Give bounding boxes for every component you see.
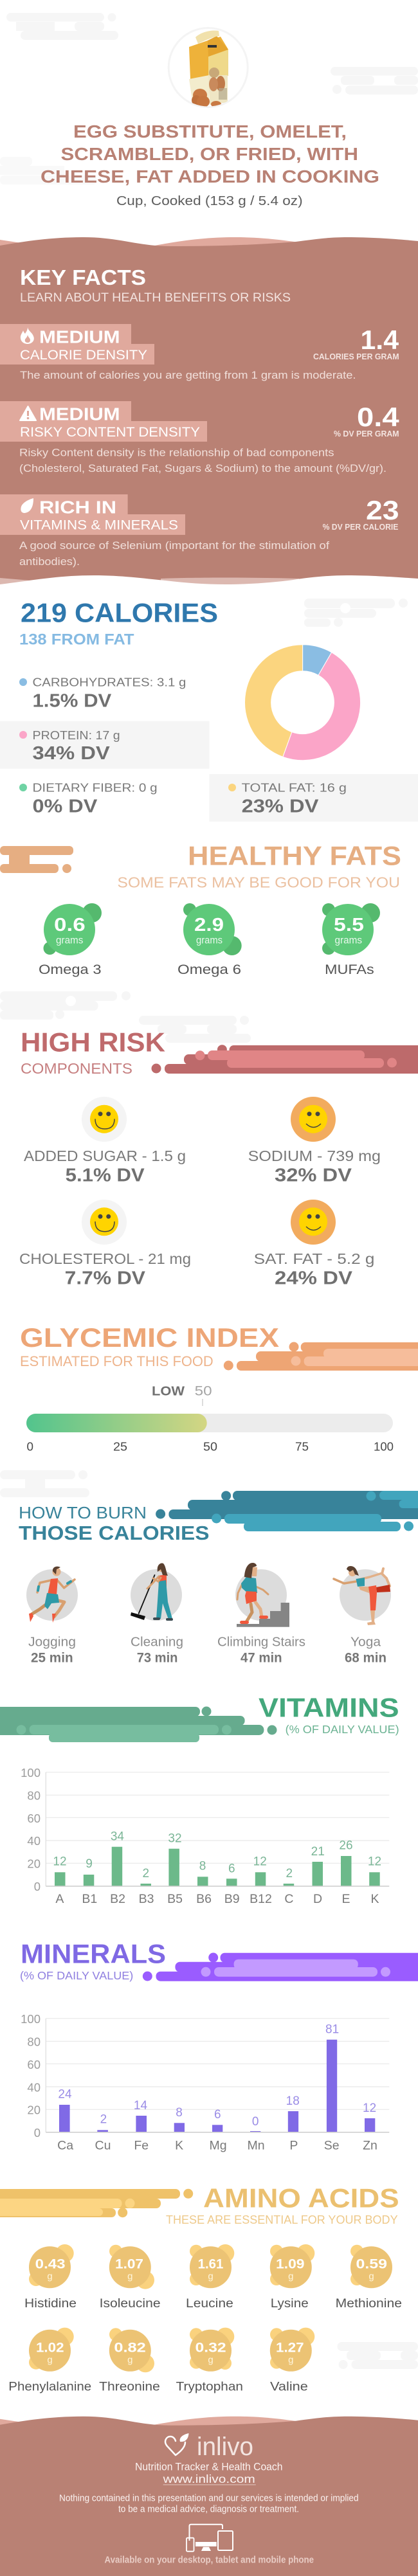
fact: calorie density: CALORIES PER GRAM xyxy=(313,352,399,361)
panel: high risk components xyxy=(19,1027,418,1288)
fact: rich in vitamins and minerals: % DV PER CALORIE xyxy=(323,522,399,532)
legend: dietary fiber: DIETARY FIBER: 0 g xyxy=(32,781,158,795)
bar chart: minerals: 0 xyxy=(34,2126,41,2139)
bar chart: vitamins: B12 xyxy=(250,1892,272,1906)
activity: yoga: Yoga xyxy=(350,1635,381,1650)
bar chart: minerals: Ca xyxy=(57,2138,73,2152)
legend: carbohydrates: CARBOHYDRATES: 3.1 g xyxy=(32,676,186,689)
fact: rich in vitamins and minerals xyxy=(0,494,399,568)
activity: yoga: 68 min xyxy=(345,1651,386,1666)
amino: methionine: g xyxy=(368,2271,374,2282)
bar chart: vitamins: 2 xyxy=(143,1867,149,1880)
amino: threonine: 0.82 xyxy=(114,2340,146,2355)
activity: jogging: Jogging xyxy=(28,1635,76,1650)
fact: risky content density: 0.4 xyxy=(357,402,399,432)
icon: person in yoga pose xyxy=(334,1566,390,1625)
gauge scale: 100 xyxy=(374,1440,394,1454)
amino: tryptophan: Tryptophan xyxy=(176,2379,243,2393)
bar chart: minerals: 100 xyxy=(21,2012,41,2026)
amino: methionine: 0.59 xyxy=(356,2256,387,2271)
ribbon: orange xyxy=(0,846,73,873)
amino: isoleucine: Isoleucine xyxy=(100,2296,161,2310)
icon: jogger xyxy=(29,1567,75,1623)
bar chart: vitamins: B1 xyxy=(82,1892,97,1906)
gauge scale: 25 xyxy=(113,1440,127,1454)
bar chart: minerals: 81 xyxy=(325,2022,339,2036)
bar chart: vitamins: 12 xyxy=(368,1855,381,1869)
title xyxy=(41,122,379,186)
amino: lysine: 1.09 xyxy=(276,2256,305,2271)
bar chart: minerals: 8 xyxy=(176,2106,183,2120)
fact: rich in vitamins and minerals: VITAMINS & MINERALS xyxy=(20,517,178,532)
bar chart: minerals: 24 xyxy=(58,2087,72,2101)
bar chart: vitamins: 32 xyxy=(168,1832,182,1846)
subheading: ESTIMATED FOR THIS FOOD xyxy=(20,1353,214,1369)
amino: phenylalanine: 1.02 xyxy=(36,2340,64,2355)
bar chart: vitamins: C xyxy=(284,1892,293,1906)
legend: dietary fiber xyxy=(19,781,158,816)
ribbon: orange xyxy=(224,1342,418,1371)
amino: valine xyxy=(270,2328,314,2393)
legend: protein xyxy=(0,721,210,769)
bar chart: vitamins: 26 xyxy=(339,1839,353,1853)
amino: isoleucine: 1.07 xyxy=(115,2256,143,2271)
bar chart: vitamins: 100 xyxy=(21,1766,41,1779)
fact: calorie density: MEDIUM xyxy=(39,327,120,347)
gauge reading xyxy=(152,1384,212,1406)
risk item: sodium xyxy=(248,1097,381,1185)
badge: omega 3 xyxy=(39,903,102,977)
risk item: cholesterol: CHOLESTEROL - 21 mg xyxy=(19,1250,191,1267)
bar chart: vitamins: 80 xyxy=(27,1788,41,1802)
icon: desktop, tablet and phone xyxy=(186,2525,233,2552)
bar chart: vitamins: A xyxy=(55,1892,64,1906)
heading: how to burn: HOW TO BURN xyxy=(19,1503,147,1522)
fact: risky content density: RISKY CONTENT DENSITY xyxy=(20,424,200,440)
serving size: Cup, Cooked (153 g / 5.4 oz) xyxy=(116,194,303,208)
subheading: (% OF DAILY VALUE) xyxy=(286,1723,399,1736)
bar chart: minerals: 2 xyxy=(100,2113,107,2127)
risk item: added sugar: ADDED SUGAR - 1.5 g xyxy=(24,1148,186,1164)
bar chart: vitamins xyxy=(21,1766,389,1906)
fact: risky content density: (Cholesterol, Saturated Fat, Sugars & Sodium) to the amount (%DV/gr). xyxy=(19,462,386,474)
activity: jogging xyxy=(26,1567,78,1666)
fact: rich in vitamins and minerals: A good source of Selenium (important for the stimulation of xyxy=(19,539,329,552)
subheading: from fat: 138 FROM FAT xyxy=(19,631,134,649)
bar chart: minerals: Mg xyxy=(209,2138,227,2152)
badge: mufas: 5.5 xyxy=(334,915,364,935)
fact: calorie density: 1.4 xyxy=(360,325,399,355)
amino: valine: Valine xyxy=(270,2379,308,2393)
legend: total fat: TOTAL FAT: 16 g xyxy=(242,781,347,795)
legend: protein: PROTEIN: 17 g xyxy=(32,728,120,742)
disclaimer: to be a medical advice, diagnosis or treatment. xyxy=(118,2504,299,2514)
panel: vitamins xyxy=(0,1693,399,1906)
amino: tryptophan xyxy=(176,2328,243,2393)
panel: how to burn those calories xyxy=(19,1491,418,1666)
badge: omega 6: 2.9 xyxy=(194,915,224,935)
badge: omega 6: Omega 6 xyxy=(177,962,241,977)
amino: threonine: Threonine xyxy=(99,2379,160,2393)
title: CHEESE, FAT ADDED IN COOKING xyxy=(41,167,379,186)
activity: cleaning xyxy=(131,1563,183,1666)
title: SCRAMBLED, OR FRIED, WITH xyxy=(60,144,358,164)
tagline: Nutrition Tracker & Health Coach xyxy=(135,2460,283,2472)
bar chart: vitamins: 20 xyxy=(27,1857,41,1871)
amino: tryptophan: g xyxy=(208,2355,214,2366)
subheading: SOME FATS MAY BE GOOD FOR YOU xyxy=(117,874,400,891)
logo: inlivo: inlivo xyxy=(197,2433,253,2461)
subheading: (% OF DAILY VALUE) xyxy=(20,1969,133,1982)
bar chart: vitamins: 40 xyxy=(27,1834,41,1848)
heading: vitamins: VITAMINS xyxy=(259,1693,399,1723)
amino: phenylalanine xyxy=(8,2328,91,2393)
risk item: added sugar xyxy=(24,1097,186,1185)
donut chart xyxy=(245,645,361,761)
bar chart: vitamins: 60 xyxy=(27,1812,41,1825)
icon: person sweeping xyxy=(131,1563,173,1621)
ribbon: red xyxy=(152,1045,418,1074)
badge: omega 6 xyxy=(177,903,242,977)
bar chart: minerals: P xyxy=(289,2138,298,2152)
activity: jogging: 25 min xyxy=(31,1651,73,1666)
badge: mufas: MUFAs xyxy=(325,962,374,977)
bar chart: vitamins: 21 xyxy=(311,1845,325,1859)
icon: flame xyxy=(21,327,34,344)
risk item: saturated fat xyxy=(254,1200,374,1288)
amino: histidine xyxy=(24,2244,77,2310)
amino: methionine: Methionine xyxy=(336,2296,402,2310)
badge: omega 6: grams xyxy=(196,935,223,946)
bar chart: minerals: 80 xyxy=(27,2035,41,2048)
amino: isoleucine: g xyxy=(127,2271,132,2282)
fact: calorie density: CALORIE DENSITY xyxy=(20,347,147,363)
panel: healthy fats xyxy=(0,841,401,977)
fact: rich in vitamins and minerals: RICH IN xyxy=(39,497,116,517)
fact: risky content density xyxy=(0,401,399,474)
amino: tryptophan: 0.32 xyxy=(195,2340,226,2355)
bar chart: minerals: K xyxy=(175,2138,183,2152)
risk item: sodium: SODIUM - 739 mg xyxy=(248,1148,381,1164)
badge: omega 3: grams xyxy=(56,935,83,946)
heading: key facts: KEY FACTS xyxy=(20,266,146,289)
ribbon: green xyxy=(0,1706,277,1742)
bar chart: minerals xyxy=(21,2012,389,2152)
amino: valine: 1.27 xyxy=(276,2340,304,2355)
icon: warning triangle xyxy=(20,406,36,420)
heading: calories: 219 CALORIES xyxy=(21,598,218,628)
badge: omega 3: 0.6 xyxy=(54,915,86,935)
amino: leucine: 1.61 xyxy=(198,2256,224,2271)
fact: calorie density xyxy=(0,324,399,381)
gauge bar xyxy=(26,1414,393,1432)
bar chart: vitamins: 9 xyxy=(86,1857,93,1871)
bar chart: minerals: 0 xyxy=(252,2115,259,2129)
heading: amino acids: AMINO ACIDS xyxy=(203,2183,399,2213)
disclaimer xyxy=(59,2494,359,2514)
bar chart: vitamins: 6 xyxy=(228,1862,235,1875)
bar chart: vitamins: B3 xyxy=(139,1892,154,1906)
risk item: cholesterol: 7.7% DV xyxy=(65,1268,146,1288)
badge: omega 3: Omega 3 xyxy=(39,962,102,977)
amino: leucine: g xyxy=(208,2271,214,2282)
icon: person climbing stairs xyxy=(237,1563,289,1627)
legend: carbohydrates: 1.5% DV xyxy=(32,690,112,711)
availability note: Available on your desktop, tablet and mobile phone xyxy=(104,2555,314,2566)
heading: minerals: MINERALS xyxy=(21,1938,166,1968)
bar chart: vitamins: E xyxy=(341,1892,350,1906)
amino: leucine: Leucine xyxy=(186,2296,233,2310)
bar chart: minerals: 18 xyxy=(286,2094,300,2108)
fact: risky content density: MEDIUM xyxy=(39,404,120,424)
bar chart: vitamins: B2 xyxy=(110,1892,125,1906)
bar chart: vitamins: 8 xyxy=(199,1860,206,1873)
bar chart: minerals: 12 xyxy=(363,2102,376,2115)
amino: isoleucine xyxy=(100,2245,161,2310)
badge: mufas: grams xyxy=(334,935,362,946)
gauge scale: 0 xyxy=(27,1440,33,1454)
amino: methionine xyxy=(336,2245,402,2310)
amino: leucine xyxy=(186,2244,234,2310)
gauge scale xyxy=(27,1440,394,1454)
heading: high risk: HIGH RISK xyxy=(21,1027,165,1058)
risk item: added sugar: 5.1% DV xyxy=(66,1165,145,1185)
bar chart: minerals: 20 xyxy=(27,2103,41,2117)
panel: calories xyxy=(0,598,418,822)
bar chart: vitamins: B5 xyxy=(167,1892,183,1906)
bar chart: minerals: Zn xyxy=(363,2138,377,2152)
activity: climbing stairs xyxy=(217,1563,305,1666)
activity: climbing stairs: 47 min xyxy=(241,1651,282,1666)
logo: inlivo xyxy=(165,2433,253,2461)
subheading: LEARN ABOUT HEALTH BENEFITS OR RISKS xyxy=(20,291,291,305)
bar chart: vitamins: 12 xyxy=(53,1855,67,1869)
panel: amino acids xyxy=(0,2183,402,2393)
panel: key facts xyxy=(0,237,418,595)
amino: lysine: Lysine xyxy=(271,2296,309,2310)
amino: threonine: g xyxy=(127,2355,132,2366)
amino: lysine: g xyxy=(288,2271,293,2282)
bar chart: minerals: 14 xyxy=(134,2099,147,2112)
website link: www.inlivo.com xyxy=(163,2472,255,2485)
bar chart: vitamins: B6 xyxy=(196,1892,212,1906)
gauge reading: 50 xyxy=(195,1384,212,1399)
heading: those calories: THOSE CALORIES xyxy=(19,1522,210,1544)
bar chart: vitamins: K xyxy=(370,1892,379,1906)
amino: histidine: Histidine xyxy=(24,2296,77,2310)
activity: yoga xyxy=(334,1566,391,1666)
legend: total fat xyxy=(210,774,418,822)
bar chart: minerals: Cu xyxy=(95,2138,111,2152)
amino: threonine xyxy=(99,2328,160,2393)
fact: rich in vitamins and minerals: 23 xyxy=(366,495,399,525)
gauge reading: LOW xyxy=(152,1384,185,1399)
amino: histidine: 0.43 xyxy=(35,2256,66,2271)
title: EGG SUBSTITUTE, OMELET, xyxy=(73,122,347,141)
legend: carbohydrates xyxy=(19,676,186,711)
subheading: THESE ARE ESSENTIAL FOR YOUR BODY xyxy=(166,2213,398,2226)
legend: total fat: 23% DV xyxy=(242,796,319,816)
amino: histidine: g xyxy=(47,2271,53,2282)
bar chart: minerals: Mn xyxy=(247,2138,265,2152)
fact: calorie density: The amount of calories you are getting from 1 gram is moderate. xyxy=(20,369,356,381)
panel: minerals xyxy=(20,1938,418,2152)
gauge scale: 75 xyxy=(295,1440,309,1454)
bar chart: minerals: Fe xyxy=(134,2138,149,2152)
bar chart: vitamins: 0 xyxy=(34,1880,41,1893)
gauge scale: 50 xyxy=(203,1440,217,1454)
risk item: sodium: 32% DV xyxy=(275,1165,352,1185)
heading: healthy fats: HEALTHY FATS xyxy=(188,841,401,871)
bar chart: vitamins: B9 xyxy=(224,1892,240,1906)
amino: valine: g xyxy=(288,2355,293,2366)
ribbon: yellow xyxy=(0,2189,193,2217)
bar chart: vitamins: 2 xyxy=(286,1867,293,1880)
legend: dietary fiber: 0% DV xyxy=(32,796,98,816)
bar chart: minerals: Se xyxy=(324,2138,340,2152)
risk item: cholesterol xyxy=(19,1200,191,1288)
risk item: saturated fat: SAT. FAT - 5.2 g xyxy=(254,1250,374,1267)
bar chart: vitamins: D xyxy=(313,1892,322,1906)
activity: climbing stairs: Climbing Stairs xyxy=(217,1635,305,1650)
badge: mufas xyxy=(322,903,380,977)
fact: risky content density: Risky Content density is the relationship of bad components xyxy=(19,446,334,458)
panel: footer xyxy=(0,2417,418,2576)
panel: glycemic index xyxy=(20,1322,418,1454)
bar chart: minerals: 40 xyxy=(27,2080,41,2094)
bar chart: minerals: 60 xyxy=(27,2058,41,2071)
fact: risky content density: % DV PER GRAM xyxy=(334,429,399,438)
bar chart: minerals: 6 xyxy=(214,2108,221,2121)
amino: lysine xyxy=(270,2244,314,2310)
bar chart: vitamins: 12 xyxy=(253,1855,267,1869)
activity: cleaning: Cleaning xyxy=(131,1635,183,1650)
ribbon: teal xyxy=(156,1491,418,1531)
subheading: components: COMPONENTS xyxy=(21,1060,132,1077)
disclaimer: Nothing contained in this presentation and our services is intended or implied xyxy=(59,2494,359,2504)
icon: leaf xyxy=(21,498,33,513)
risk item: saturated fat: 24% DV xyxy=(275,1268,353,1288)
amino: phenylalanine: Phenylalanine xyxy=(8,2379,91,2393)
fact: rich in vitamins and minerals: antibodies). xyxy=(19,555,80,568)
food photo: egg substitute carton xyxy=(168,28,248,107)
bar chart: vitamins: 34 xyxy=(111,1830,124,1843)
ribbon: purple xyxy=(143,1953,418,1981)
amino: phenylalanine: g xyxy=(47,2355,53,2366)
heading: glycemic index: GLYCEMIC INDEX xyxy=(20,1322,279,1353)
activity: cleaning: 73 min xyxy=(137,1651,177,1666)
legend: protein: 34% DV xyxy=(32,743,111,764)
